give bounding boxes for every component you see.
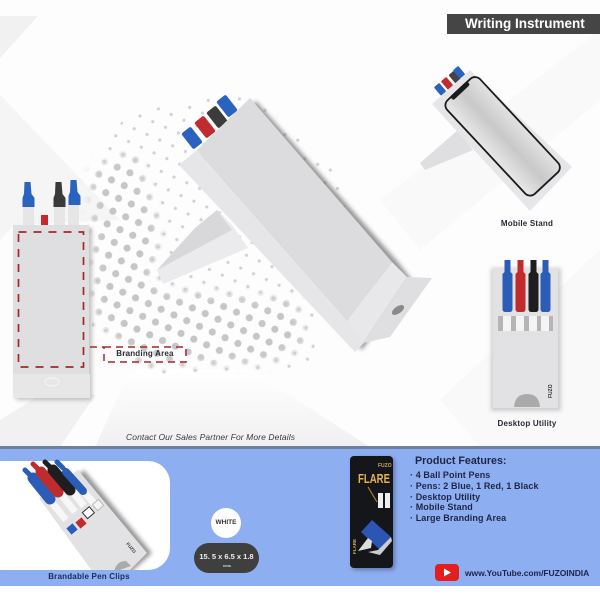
background facets bbox=[0, 0, 600, 448]
features list: · Mobile Stand bbox=[410, 502, 473, 512]
contact note: Contact Our Sales Partner For More Details bbox=[126, 432, 295, 442]
size pill bbox=[194, 543, 259, 573]
features list bbox=[410, 470, 539, 523]
box side label: FLARE bbox=[352, 539, 357, 554]
colour swatch circle bbox=[211, 508, 241, 538]
halftone dot pattern bbox=[86, 97, 345, 374]
icon: pen tips bbox=[181, 94, 238, 150]
brand mark: FUZO bbox=[548, 384, 554, 398]
features list: · Large Branding Area bbox=[410, 513, 506, 523]
desktop utility product bbox=[491, 260, 561, 411]
features list: · Pens: 2 Blue, 1 Red, 1 Black bbox=[410, 481, 539, 491]
swatch label: WHITE bbox=[216, 519, 236, 526]
pen tips bbox=[434, 66, 465, 96]
mobile stand product bbox=[420, 66, 572, 211]
header tag: Writing Instrument bbox=[465, 16, 585, 31]
product box bbox=[350, 456, 395, 570]
box brand label: FLARE bbox=[358, 471, 390, 486]
branding callout box bbox=[90, 347, 186, 362]
barrels bbox=[50, 491, 94, 520]
phone bbox=[442, 73, 563, 198]
pens bbox=[25, 462, 83, 499]
header tag bbox=[447, 14, 600, 34]
box logo: FUZO bbox=[378, 463, 392, 469]
main product: open utility stand bbox=[157, 94, 432, 352]
brand mark: FUZO bbox=[125, 541, 137, 554]
pens bbox=[22, 180, 80, 227]
youtube url: www.YouTube.com/FUZOINDIA bbox=[465, 568, 589, 578]
caption: mobile stand: Mobile Stand bbox=[501, 219, 553, 228]
size label: 15. 5 x 6.5 x 1.8 bbox=[199, 552, 254, 561]
icon: youtube bbox=[435, 564, 459, 581]
product features bbox=[410, 455, 539, 523]
left product: front view bbox=[13, 180, 92, 400]
blue footer band bbox=[0, 446, 600, 586]
side strip bbox=[179, 150, 364, 352]
product face bbox=[197, 98, 392, 320]
size unit: cms bbox=[223, 563, 231, 568]
slots bbox=[498, 316, 553, 331]
branding area dashed outline bbox=[18, 232, 84, 367]
caption: desktop utility: Desktop Utility bbox=[497, 419, 557, 428]
pen clips panel bbox=[0, 461, 170, 575]
features heading: Product Features: bbox=[415, 455, 506, 467]
caption: brandable pen clips: Brandable Pen Clips bbox=[48, 572, 130, 581]
rotated product bbox=[25, 462, 152, 575]
caption: branding area: Branding Area bbox=[116, 349, 174, 358]
stand leg bbox=[157, 210, 248, 284]
features list: · Desktop Utility bbox=[410, 492, 480, 502]
base flap bbox=[347, 262, 432, 343]
clip windows bbox=[66, 499, 104, 535]
pens bbox=[502, 260, 550, 312]
features list: · 4 Ball Point Pens bbox=[410, 470, 490, 480]
